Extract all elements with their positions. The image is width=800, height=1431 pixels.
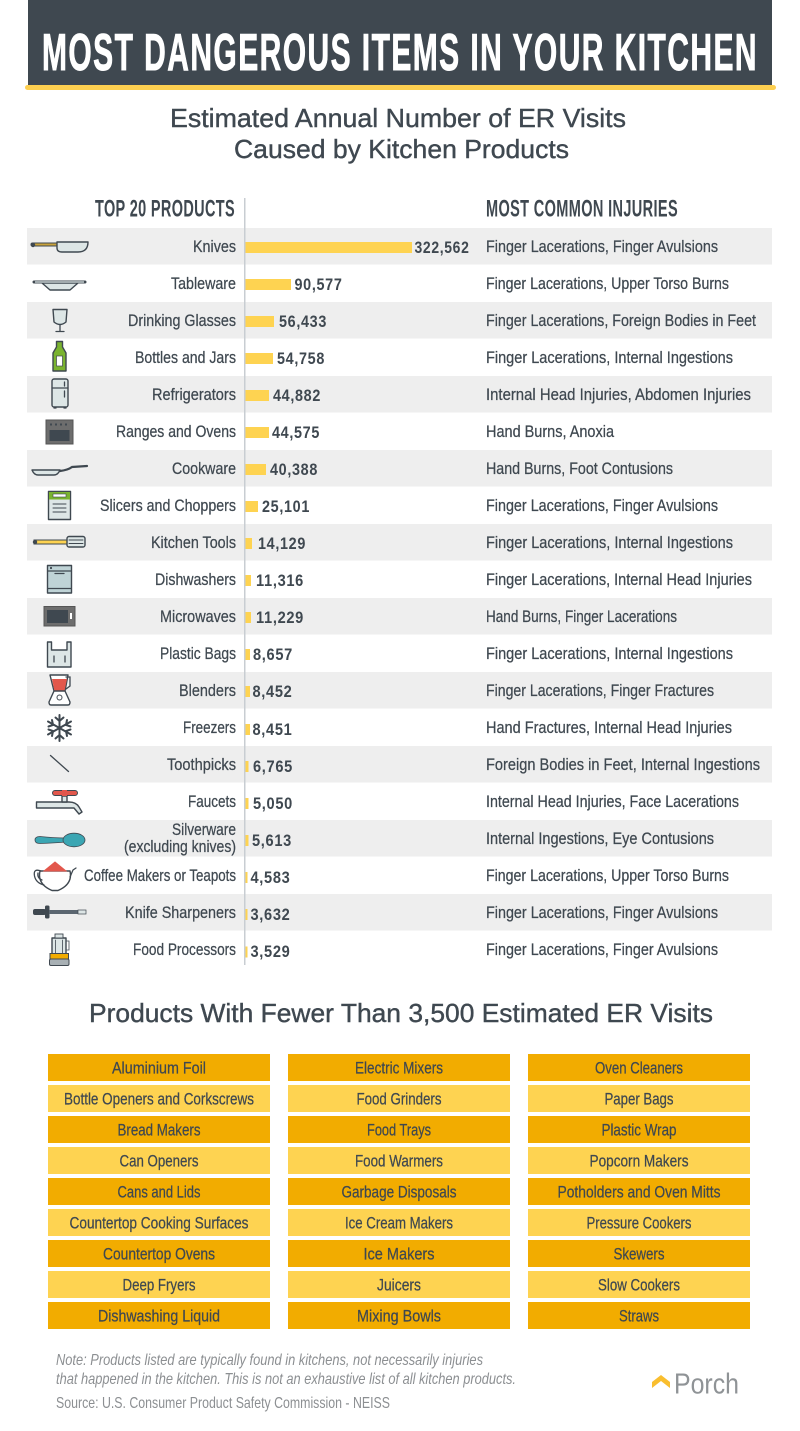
icon: dishwasher (48, 566, 72, 593)
section heading: fewer than 3,500: Products With Fewer Than 3,500 Estimated ER Visits (89, 998, 713, 1028)
row: Dishwashers (48, 566, 752, 593)
icon: oven (46, 420, 73, 444)
value: Silverware: 5,613 (252, 831, 292, 850)
value: Food Processors: 3,529 (250, 942, 290, 961)
value: Refrigerators: 44,882 (273, 386, 321, 405)
label: Coffee Makers or Teapots: Coffee Makers or Teapots (84, 866, 236, 885)
label: Blenders: Blenders (179, 681, 236, 700)
value: Dishwashers: 11,316 (256, 571, 304, 590)
icon: snowflake (48, 715, 71, 741)
icon: spoon (35, 833, 85, 847)
bar: Toothpicks (245, 761, 248, 772)
value: Microwaves: 11,229 (256, 608, 304, 627)
note: Note: Products listed are typically found in kitchens, not necessarily injuries (56, 1352, 483, 1369)
bar: Silverware (245, 835, 248, 846)
list column 1: Countertop Ovens (103, 1244, 215, 1264)
injuries: Kitchen Tools: Finger Lacerations, Internal Ingestions (486, 533, 733, 552)
icon: frying pan (32, 466, 87, 475)
injuries: Toothpicks: Foreign Bodies in Feet, Internal Ingestions (486, 755, 760, 774)
bar: Knife Sharpeners (245, 909, 248, 920)
row: Silverware (27, 820, 772, 856)
icon: spatula (33, 536, 85, 547)
value: Faucets: 5,050 (253, 794, 293, 813)
injuries: Bottles and Jars: Finger Lacerations, Internal Ingestions (486, 348, 733, 367)
bar: Dishwashers (245, 575, 251, 586)
subtitle: Estimated Annual Number of ER Visits (170, 103, 626, 133)
list column 1: Deep Fryers (122, 1276, 196, 1294)
column heading: most common injuries: MOST COMMON INJURIES (486, 196, 678, 222)
value: Toothpicks: 6,765 (253, 757, 293, 776)
row: Toothpicks (27, 746, 772, 782)
list column 3: Straws (619, 1306, 659, 1326)
bar: Food Processors (245, 946, 248, 958)
row: Knife Sharpeners (27, 894, 772, 930)
source: Source: U.S. Consumer Product Safety Commission - NEISS (56, 1395, 390, 1412)
label: Drinking Glasses: Drinking Glasses (128, 311, 236, 330)
value: Tableware: 90,577 (294, 275, 342, 294)
bar: Cookware (245, 464, 266, 475)
row: Cookware (27, 450, 772, 486)
value: Drinking Glasses: 56,433 (279, 312, 327, 331)
list column 1: Can Openers (120, 1152, 198, 1170)
row: Freezers (48, 715, 732, 741)
injuries: Refrigerators: Internal Head Injuries, Abdomen Injuries (486, 385, 751, 404)
injuries: Slicers and Choppers: Finger Lacerations, Finger Avulsions (486, 496, 718, 515)
list column 3: Plastic Wrap (602, 1120, 676, 1140)
icon: food processor (50, 934, 69, 966)
label: Knife Sharpeners: Knife Sharpeners (125, 903, 236, 922)
injuries: Ranges and Ovens: Hand Burns, Anoxia (486, 422, 614, 441)
title banner (25, 0, 776, 90)
row: Slicers and Choppers (48, 492, 718, 520)
list column 1: Countertop Cooking Surfaces (70, 1214, 248, 1232)
list column 3: Potholders and Oven Mitts (558, 1182, 720, 1202)
list column 2: Garbage Disposals (342, 1182, 456, 1202)
icon: plate (34, 282, 85, 290)
list column 2: Food Trays (367, 1120, 431, 1140)
bar: Blenders (245, 686, 250, 697)
label: Toothpicks: Toothpicks (167, 755, 236, 774)
injuries: Knife Sharpeners: Finger Lacerations, Finger Avulsions (486, 903, 718, 922)
injuries: Coffee Makers or Teapots: Finger Lacerations, Upper Torso Burns (486, 866, 729, 885)
label: Cookware: Cookware (172, 459, 236, 478)
axis line (244, 198, 246, 965)
injuries: Cookware: Hand Burns, Foot Contusions (486, 459, 673, 478)
note: that happened in the kitchen. This is not an exhaustive list of all kitchen products. (56, 1371, 516, 1388)
icon: plastic bag (48, 642, 71, 667)
list column 1: Cans and Lids (118, 1182, 200, 1202)
value: Ranges and Ovens: 44,575 (272, 423, 320, 442)
injuries: Knives: Finger Lacerations, Finger Avulsions (486, 237, 718, 256)
list column 3: Slow Cookers (598, 1276, 680, 1294)
list column 2: Ice Makers (364, 1244, 434, 1264)
list column 2: Mixing Bowls (357, 1306, 441, 1326)
label: Silverware: Silverware (172, 820, 236, 839)
list column 3: Oven Cleaners (595, 1058, 683, 1078)
injuries: Microwaves: Hand Burns, Finger Lacerations (486, 607, 677, 626)
label: Silverware (124, 820, 236, 856)
bar: Plastic Bags (245, 649, 250, 660)
value: Coffee Makers or Teapots: 4,583 (250, 868, 290, 887)
label: Silverware: (excluding knives) (124, 837, 236, 856)
label: Food Processors: Food Processors (133, 940, 236, 959)
value: Kitchen Tools: 14,129 (258, 534, 306, 553)
injuries: Silverware: Internal Ingestions, Eye Contusions (486, 829, 714, 848)
list column 1: Aluminium Foil (112, 1058, 206, 1078)
list column 2 (288, 1054, 510, 1329)
value: Freezers: 8,451 (252, 720, 292, 739)
injuries: Freezers: Hand Fractures, Internal Head Injuries (486, 718, 732, 737)
value: Knife Sharpeners: 3,632 (250, 905, 290, 924)
list column 3: Paper Bags (604, 1090, 674, 1108)
bar: Refrigerators (245, 390, 269, 401)
injuries: Food Processors: Finger Lacerations, Finger Avulsions (486, 940, 718, 959)
row: Kitchen Tools (27, 524, 772, 560)
row: Faucets (36, 790, 739, 814)
icon: knife (31, 242, 88, 252)
label: Refrigerators: Refrigerators (152, 385, 236, 404)
list column 2: Electric Mixers (355, 1058, 443, 1078)
row: Tableware (34, 274, 729, 294)
bar: Bottles and Jars (245, 353, 273, 364)
label: Bottles and Jars: Bottles and Jars (135, 348, 236, 367)
list column 1: Bread Makers (118, 1120, 200, 1140)
value: Plastic Bags: 8,657 (253, 645, 293, 664)
value: Slicers and Choppers: 25,101 (262, 497, 310, 516)
row: Coffee Makers or Teapots (34, 862, 729, 890)
row: Microwaves (27, 598, 772, 634)
injuries: Faucets: Internal Head Injuries, Face Lacerations (486, 792, 739, 811)
injuries: Tableware: Finger Lacerations, Upper Torso Burns (486, 274, 729, 293)
list column 2: Ice Cream Makers (345, 1214, 453, 1232)
list column 3 (528, 1054, 750, 1329)
icon: blender (49, 675, 70, 705)
bar: Tableware (245, 279, 291, 290)
icon: microwave (44, 606, 75, 626)
label: Plastic Bags: Plastic Bags (160, 644, 236, 663)
label: Microwaves: Microwaves (160, 607, 236, 626)
value: Cookware: 40,388 (270, 460, 318, 479)
list column 2: Food Warmers (355, 1152, 443, 1170)
bar: Slicers and Choppers (245, 501, 258, 512)
label: Knives: Knives (193, 237, 236, 256)
value: Bottles and Jars: 54,758 (277, 349, 325, 368)
list column 1: Bottle Openers and Corkscrews (64, 1090, 254, 1108)
row: Refrigerators (27, 376, 772, 412)
list column 3: Skewers (614, 1244, 664, 1264)
bar: Drinking Glasses (245, 316, 274, 327)
list column 3: Popcorn Makers (590, 1152, 688, 1170)
bar: Ranges and Ovens (245, 427, 269, 438)
row: Ranges and Ovens (46, 420, 614, 444)
value: Knives: 322,562 (414, 238, 470, 257)
row: Plastic Bags (48, 642, 733, 667)
injuries: Dishwashers: Finger Lacerations, Internal Head Injuries (486, 570, 752, 589)
icon: knife sharpener (33, 906, 86, 918)
subtitle: Caused by Kitchen Products (234, 134, 569, 164)
bar: Kitchen Tools (245, 538, 252, 549)
label: Faucets: Faucets (188, 792, 236, 811)
injuries: Blenders: Finger Lacerations, Finger Fractures (486, 681, 714, 700)
label: Slicers and Choppers: Slicers and Choppers (100, 496, 236, 515)
icon: faucet (36, 790, 82, 814)
icon: bottle (53, 342, 66, 371)
icon: refrigerator (52, 379, 68, 408)
column heading: top 20 products: TOP 20 PRODUCTS (95, 196, 235, 222)
bar: Coffee Makers or Teapots (245, 872, 248, 883)
note (56, 1352, 516, 1388)
bar: Knives (245, 242, 412, 253)
logo: Porch (652, 1368, 739, 1400)
icon: glass (53, 310, 67, 332)
list column 2: Juicers (377, 1276, 421, 1294)
injuries: Drinking Glasses: Finger Lacerations, Foreign Bodies in Feet (486, 311, 756, 330)
bar: Faucets (245, 798, 248, 809)
bar: Microwaves (245, 612, 251, 623)
value: Blenders: 8,452 (252, 682, 292, 701)
label: Ranges and Ovens: Ranges and Ovens (116, 422, 236, 441)
injuries: Plastic Bags: Finger Lacerations, Internal Ingestions (486, 644, 733, 663)
list column 1: Dishwashing Liquid (98, 1306, 220, 1326)
row: Knives (27, 228, 772, 264)
label: Freezers: Freezers (183, 718, 236, 737)
row: Blenders (27, 672, 772, 708)
label: Dishwashers: Dishwashers (155, 570, 236, 589)
list column 3: Pressure Cookers (586, 1214, 692, 1232)
logo: Porch: Porch (674, 1368, 739, 1400)
list column 2: Food Grinders (356, 1090, 442, 1108)
label: Tableware: Tableware (171, 274, 236, 293)
icon: toothpick (50, 756, 68, 772)
row: Bottles and Jars (53, 342, 733, 371)
row: Drinking Glasses (27, 302, 772, 338)
row: Food Processors (50, 934, 718, 966)
label: Kitchen Tools: Kitchen Tools (151, 533, 236, 552)
subtitle (170, 103, 626, 164)
bar: Freezers (245, 724, 250, 735)
icon: teapot (34, 862, 76, 890)
icon: slicer (48, 492, 70, 520)
list column 1 (48, 1054, 270, 1329)
